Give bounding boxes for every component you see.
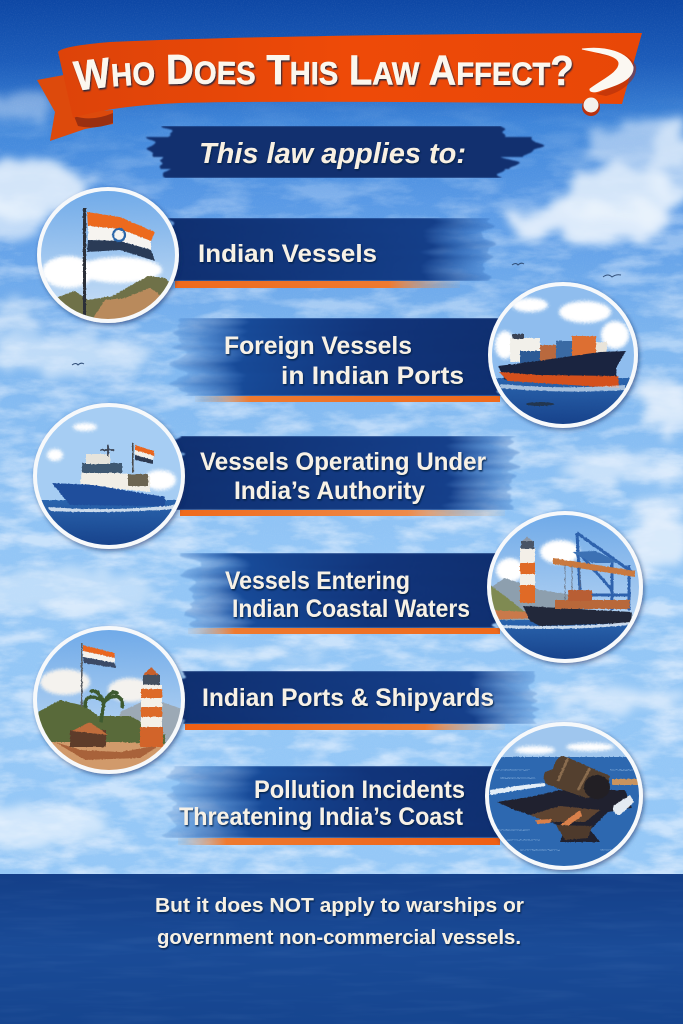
label [225, 567, 470, 623]
footer text: government non-commercial vessels. [157, 927, 521, 949]
icon: coast with flag and lighthouse [33, 626, 185, 775]
heading: WHO DOES THIS LAW AFFECT? [72, 54, 574, 92]
item: Foreign Vessels in Indian Ports [178, 282, 638, 428]
icon: oil barrel spill [485, 722, 643, 870]
ribbon tail [37, 75, 113, 141]
label: Foreign Vessels [224, 332, 412, 360]
footer panel [0, 874, 683, 1024]
ribbon band [58, 33, 642, 118]
label: Indian Vessels [198, 240, 377, 268]
label: Indian Ports & Shipyards [202, 684, 494, 712]
item: Indian Ports & Shipyards [33, 626, 535, 775]
item: Pollution Incidents Threatening India's Coast [172, 722, 643, 870]
label [179, 776, 465, 831]
icon: Indian flag [37, 187, 179, 325]
item: Vessels Operating Under India's Authority [33, 403, 513, 550]
label: in Indian Ports [281, 362, 464, 390]
label: Vessels Operating Under [200, 448, 486, 476]
subheading: This law applies to: [199, 138, 466, 170]
icon: port with lighthouse and crane [487, 511, 643, 664]
footer text: But it does NOT apply to warships or [155, 895, 524, 917]
label [200, 448, 486, 505]
icon: container ship [488, 282, 638, 428]
label [224, 332, 464, 390]
label: Indian Coastal Waters [232, 595, 470, 623]
icon: birds [72, 263, 621, 365]
label: Threatening India’s Coast [179, 803, 464, 831]
footer background [0, 874, 683, 1024]
title ribbon [37, 33, 642, 141]
label: Vessels Entering [225, 567, 410, 595]
icon: large question mark [582, 48, 636, 116]
label: India’s Authority [234, 477, 425, 505]
banner [175, 436, 513, 516]
subtitle brush [148, 126, 533, 178]
banner [188, 553, 500, 634]
ribbon fold [74, 113, 113, 127]
icon: patrol ship [33, 403, 185, 550]
banner [170, 218, 488, 288]
item: Vessels Entering Indian Coastal Waters [188, 511, 643, 664]
banner [172, 766, 500, 845]
banner [178, 318, 500, 402]
item: Indian Vessels [37, 187, 488, 325]
footer text [155, 895, 524, 949]
banner [180, 671, 535, 730]
brush stroke [148, 126, 533, 178]
label: Pollution Incidents [254, 776, 465, 804]
